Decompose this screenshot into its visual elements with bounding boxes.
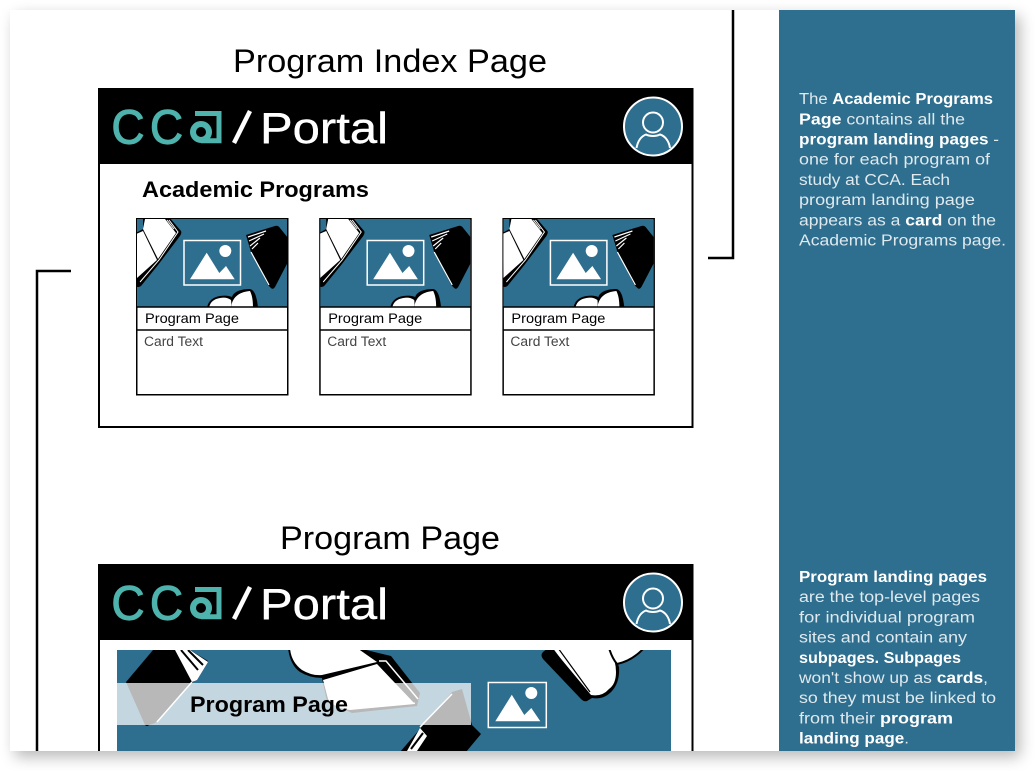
text block: program landing pages: so they must be linked to [799,690,996,707]
text block: academic programs page: study at CCA. Each [799,172,950,189]
illustration: white book right [542,648,644,701]
card: program page 3 [502,217,654,395]
panel: program page mockup [98,564,693,765]
text block: academic programs page: Academic Programs page. [799,232,1006,250]
text block: program landing pages: landing page . [799,731,909,748]
icon: image placeholder [488,682,546,728]
logo: CCA Portal: Portal [260,580,388,629]
heading: Academic Programs: Academic Programs [142,177,369,202]
logo: CCA Portal [113,109,385,145]
heading: Program Index Page: Program Index Page [233,43,547,79]
heading: Program Page: Program Page [280,520,500,556]
text block: program landing pages: Program landing pages [799,569,987,586]
text block: academic programs page: The Academic Programs [799,91,993,108]
panel: program index page mockup [98,88,693,427]
text block: program landing pages: from their program [799,710,953,727]
illustration: open white book centre [288,648,420,713]
text block: academic programs page: one for each program of [799,152,991,169]
card: program page 1: Program Page [145,310,239,326]
card: program page 1: Card Text [144,334,203,349]
logo: CCA Portal: C [112,102,144,154]
connector: top right bracket [708,10,733,258]
logo: CCA Portal [113,585,385,621]
logo: CCA Portal: C [150,578,183,630]
text block: academic programs page: program landing page [799,192,975,209]
panel: sidebar [779,10,1015,751]
text block: program landing pages: won't show up as cards , [798,670,988,687]
hero title: Program Page: Program Page [190,692,348,717]
header bar: portal [98,88,693,164]
text block: program landing pages: subpages. Subpages [799,650,961,667]
logo: CCA Portal: C [150,102,183,154]
text block: academic programs page: program landing pages - [799,132,999,148]
card: program page 3: Card Text [510,334,570,349]
text block: program landing pages: are the top-level pages [799,589,980,606]
text block: program landing pages: for individual program [799,609,975,626]
logo: CCA Portal: C [112,578,144,630]
connector: left bracket [37,271,71,751]
header bar: portal [98,564,693,640]
title strip [117,683,471,725]
hero banner [117,648,671,752]
icon: user avatar [624,574,682,632]
illustration: black book lower [400,689,481,752]
card: program page 1 [136,217,288,395]
icon: user avatar [624,98,682,156]
text block: program landing pages [798,569,996,748]
text block: program landing pages: sites and contain any [799,630,967,647]
card: program page 2: Program Page [328,310,422,326]
text block: academic programs page: Page contains all the [799,111,965,128]
card: program page 2 [319,217,471,395]
card: program page 3: Program Page [511,310,606,326]
card: program page 2: Card Text [327,334,386,349]
illustration: black book left [126,650,208,726]
logo: CCA Portal: Portal [260,104,388,153]
text block: academic programs page [799,91,1006,250]
text block: academic programs page: appears as a card on the [799,212,996,229]
